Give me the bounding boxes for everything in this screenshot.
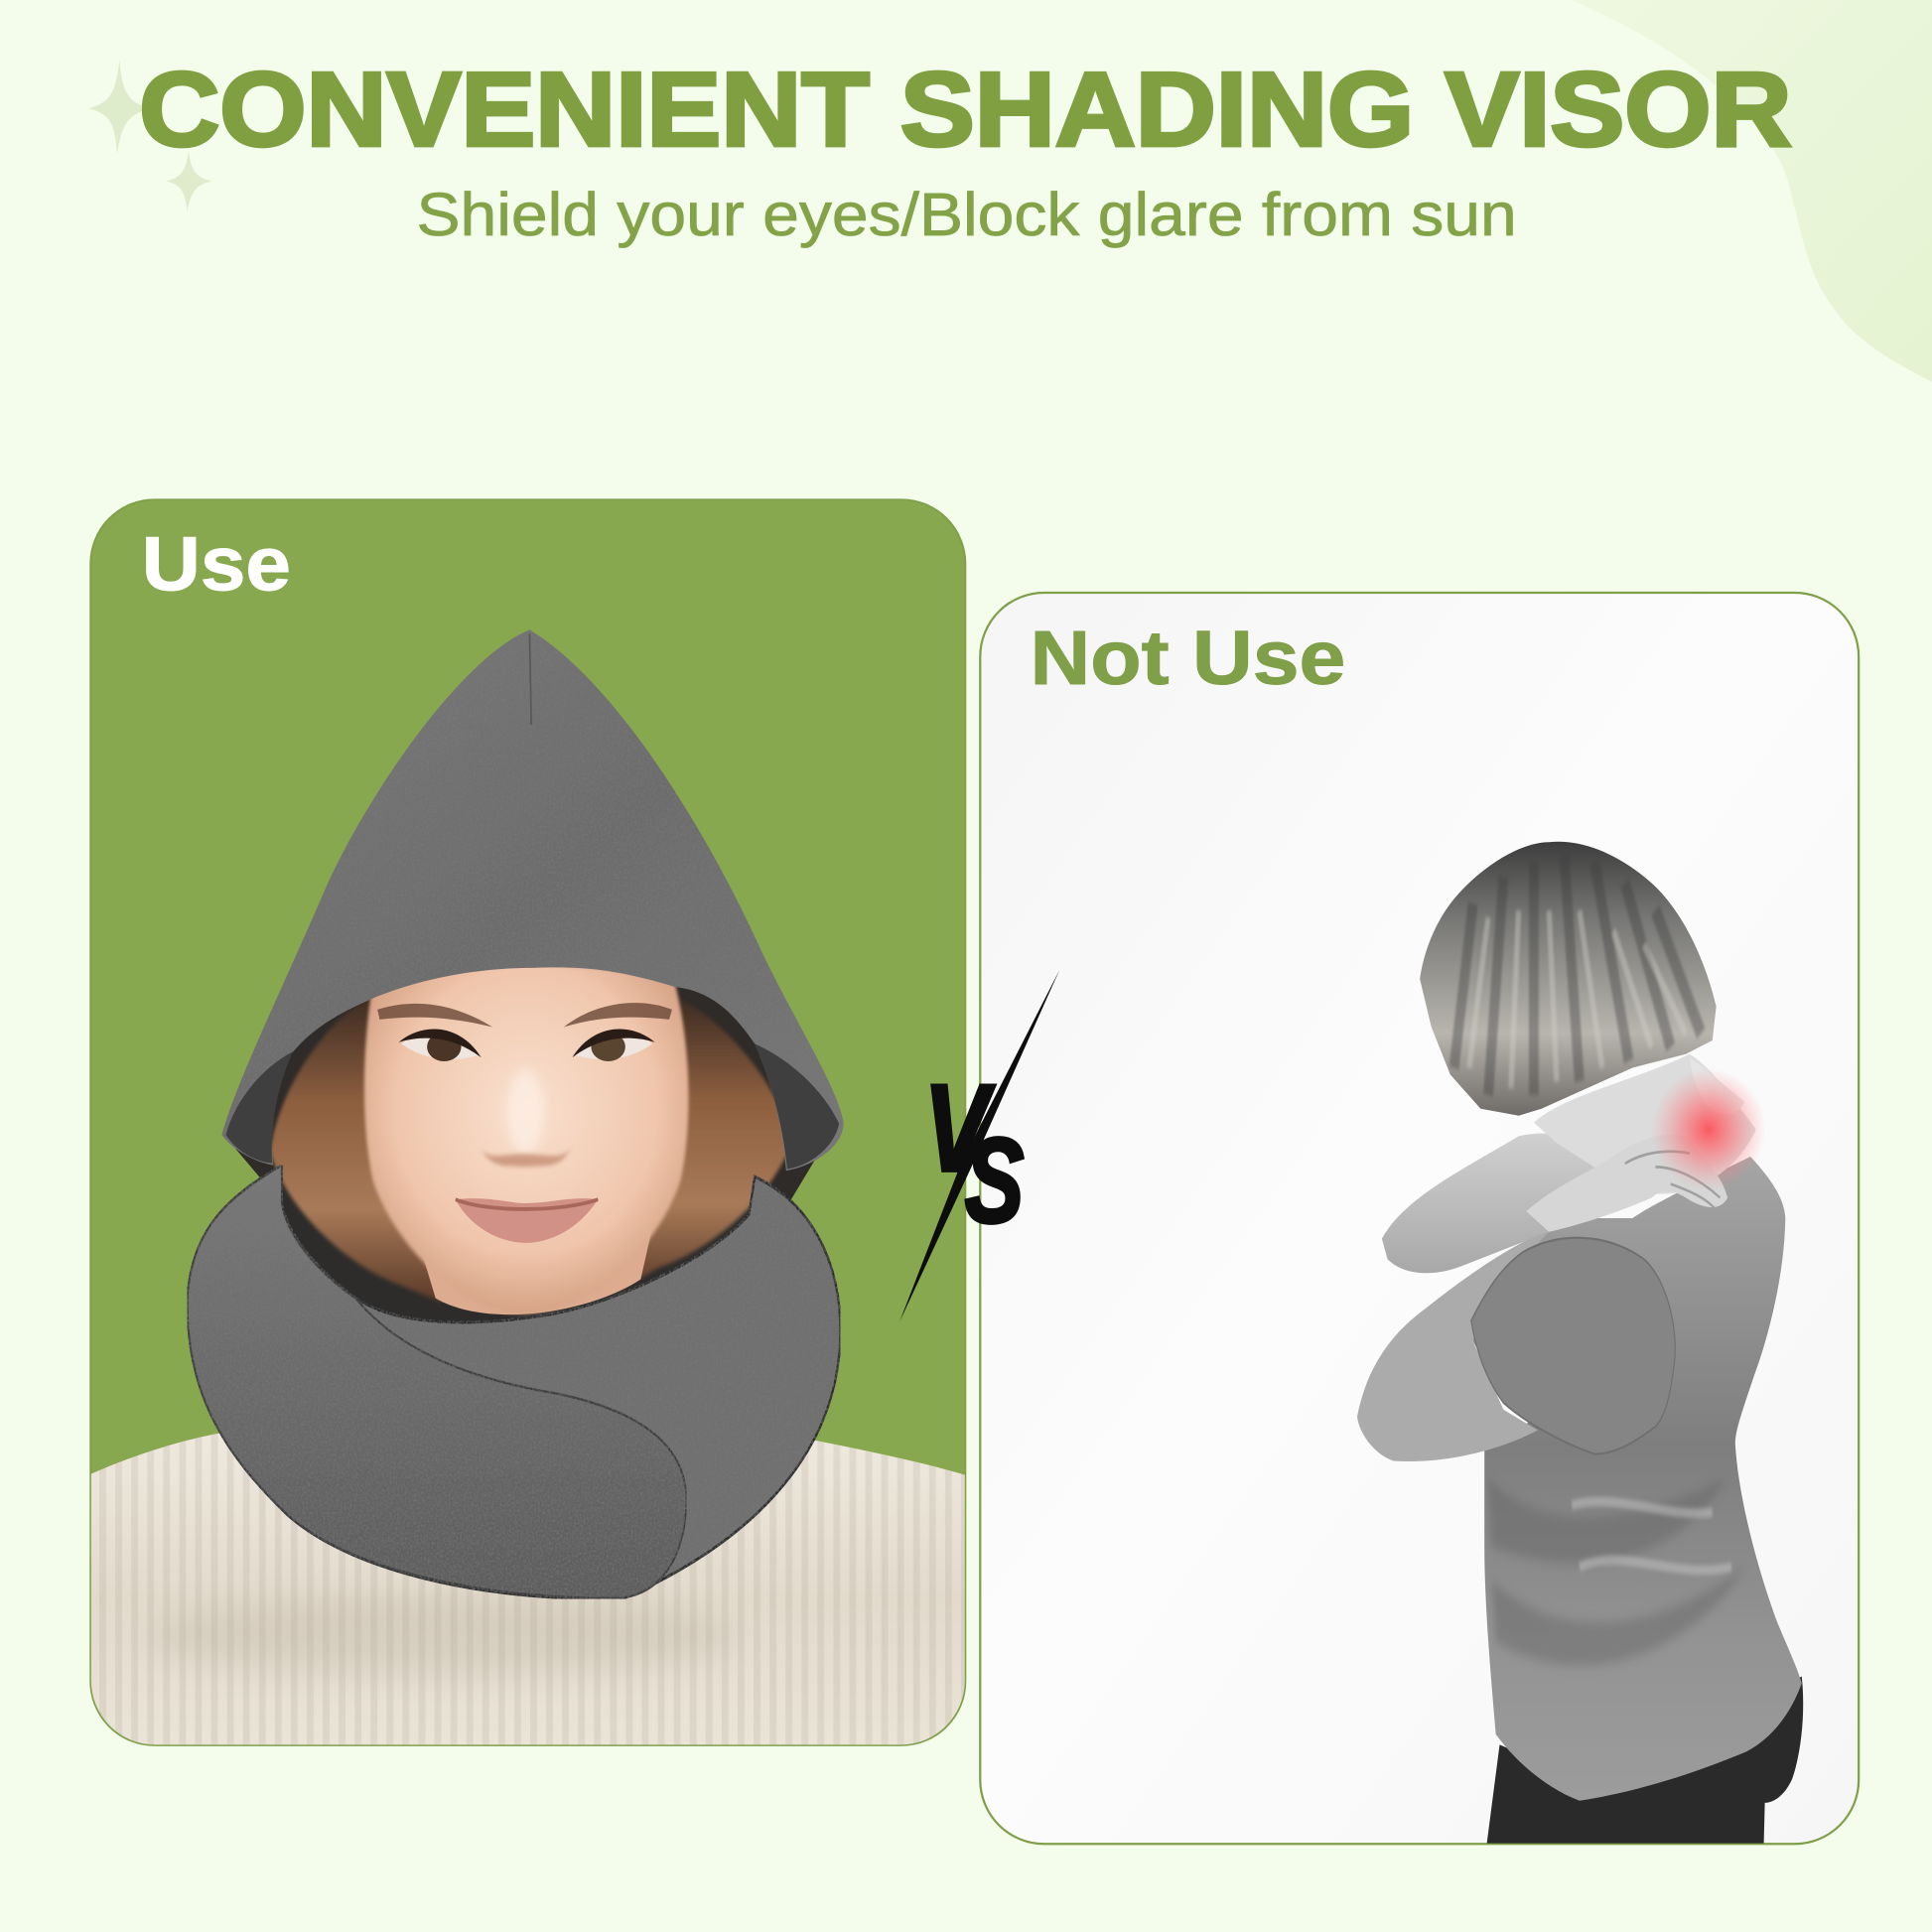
letter V: V [924, 1060, 996, 1197]
t-shirt body [1473, 1157, 1802, 1801]
hood [221, 629, 844, 1171]
face [364, 963, 689, 1313]
hood interior [234, 969, 814, 1199]
neck [1534, 1054, 1756, 1194]
upper arm [1382, 1134, 1652, 1273]
icon: small sparkle [167, 150, 211, 211]
neck pillow back ring [188, 1166, 840, 1598]
panel background [90, 499, 965, 1745]
trousers [1486, 1676, 1803, 1848]
lips [456, 1198, 598, 1243]
subtitle: Shield your eyes/Block glare from sun [416, 181, 1517, 248]
hair [1420, 842, 1717, 1116]
neck pillow front tube [188, 1166, 686, 1598]
hood inner brim right [755, 1043, 839, 1170]
finger lines [1625, 1152, 1720, 1208]
fingers of other hand [1690, 1058, 1744, 1108]
panel: use [76, 499, 971, 1781]
hood seam [529, 633, 531, 725]
hair right [613, 995, 791, 1295]
panel background [980, 593, 1859, 1844]
right eye [572, 1029, 655, 1061]
photo: woman wearing hooded neck pillow [76, 629, 971, 1781]
letter S: S [965, 1113, 1024, 1248]
shirt sleeve [1471, 1238, 1675, 1454]
decorative corner blob [1571, 0, 1932, 382]
label: not use: Not Use [1031, 616, 1345, 701]
right brow [564, 1003, 672, 1028]
inner collar [284, 1203, 750, 1320]
hand on neck [1527, 1168, 1727, 1232]
sweater [91, 1434, 965, 1745]
hair left [270, 995, 441, 1302]
left eye [398, 1029, 482, 1061]
icon: large sparkle [88, 60, 150, 154]
left brow [377, 1004, 492, 1028]
photo: woman holding painful neck [1357, 842, 1803, 1848]
shirt sheen [1572, 1501, 1731, 1571]
pain highlight [1652, 1067, 1765, 1190]
nose [479, 1070, 572, 1167]
hair strands [1454, 856, 1701, 1095]
shirt folds [1488, 1478, 1746, 1665]
title: CONVENIENT SHADING VISOR [139, 52, 1792, 168]
panel: not use [980, 593, 1859, 1848]
versus badge [899, 970, 1059, 1322]
hood inner brim left [225, 1051, 293, 1163]
hair light strands [1469, 910, 1686, 1088]
neck [424, 1233, 651, 1314]
lower arm [1357, 1232, 1549, 1461]
label: use: Use [142, 521, 291, 607]
slash [899, 970, 1059, 1322]
